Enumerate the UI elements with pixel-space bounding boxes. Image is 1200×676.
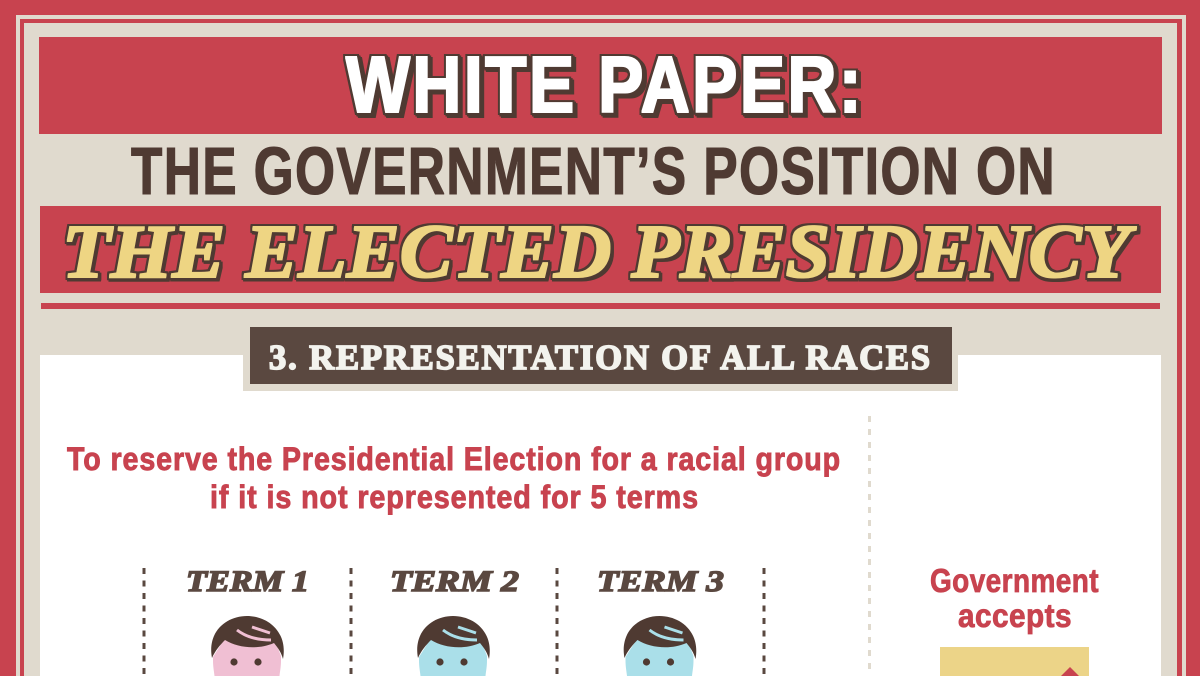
section heading tab: 3. REPRESENTATION OF ALL RACES (269, 338, 932, 377)
term separators (144, 568, 764, 676)
icon: term 3 person (624, 616, 696, 676)
title banner: the elected presidency: THE ELECTED PRESIDENCY (62, 210, 1137, 294)
banner underline (41, 303, 1160, 309)
section heading tab (243, 327, 958, 391)
white content panel (40, 355, 1161, 676)
government accepts heading: accepts (958, 597, 1072, 634)
proposal text: To reserve the Presidential Election for a racial group (67, 441, 841, 477)
term labels: TERM 3 (597, 565, 724, 598)
term labels: TERM 2 (390, 565, 519, 598)
icon: term 2 person (417, 616, 490, 676)
term labels: TERM 1 (186, 565, 309, 598)
government accepts heading (930, 562, 1099, 634)
title banner: white paper: WHITE PAPER: (346, 40, 864, 129)
vertical divider (868, 416, 871, 672)
term labels (186, 565, 724, 598)
yellow card with arrow (940, 647, 1089, 676)
icon: term 1 person (211, 616, 284, 676)
proposal text: if it is not represented for 5 terms (210, 479, 699, 515)
title banner: white paper (39, 37, 1162, 134)
proposal text (67, 441, 841, 515)
government accepts heading: Government (930, 562, 1099, 599)
